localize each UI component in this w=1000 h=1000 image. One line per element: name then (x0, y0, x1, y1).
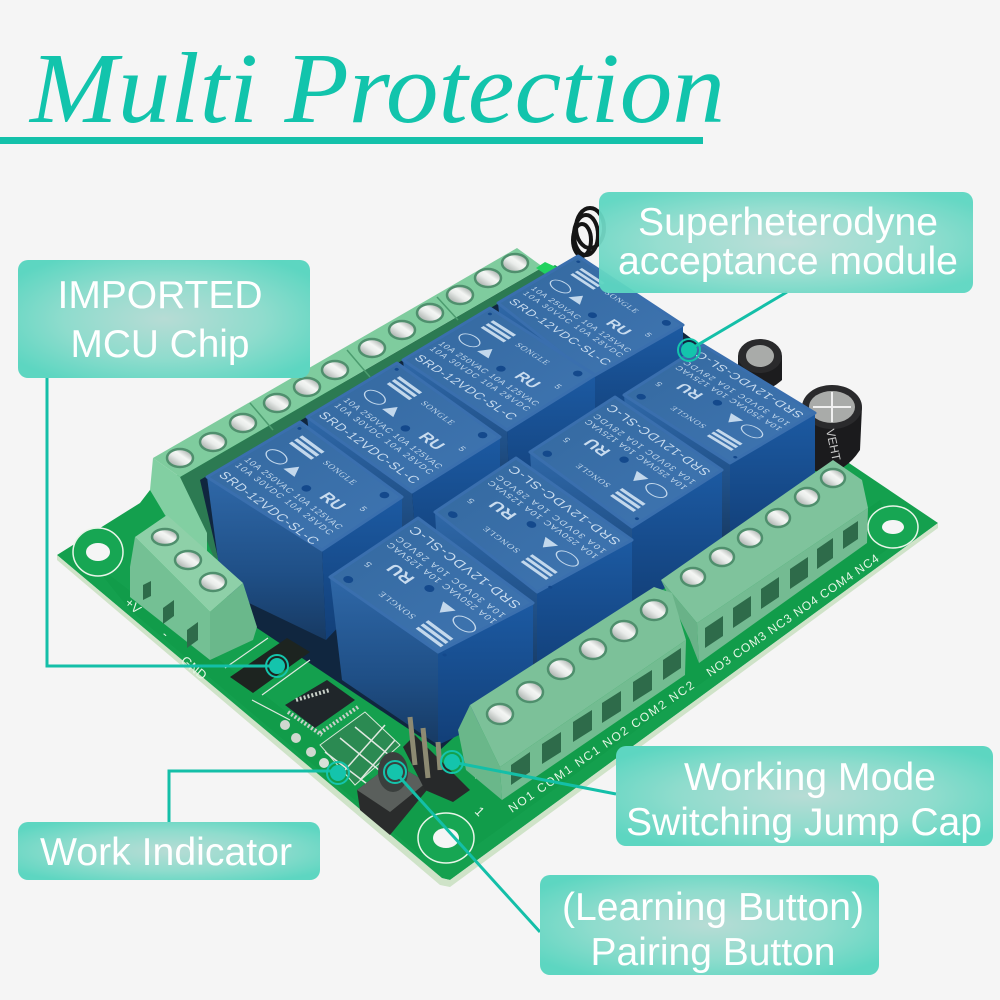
callout: superheterodyne module (599, 192, 973, 293)
power labels (122, 595, 210, 683)
relay front 3: 10A 250VAC 10A 125VAC (582, 418, 690, 491)
relay front 2: 5 (465, 497, 477, 505)
leader: pairing button (384, 761, 540, 932)
relay rear 1: SONGLE (320, 459, 360, 487)
power labels: GND (178, 653, 210, 683)
relay front 1: 10A 250VAC 10A 125VAC (384, 541, 499, 625)
leader: jump cap (441, 751, 616, 794)
callout: pairing button: Pairing Button (590, 931, 836, 974)
relay front 2: RU (485, 498, 521, 522)
jumper header: 1 (472, 804, 488, 819)
green PCB (57, 265, 938, 887)
relay rear 2: 10A 250VAC 10A 125VAC (341, 396, 445, 470)
relay front 1: 10A 30VDC 10A 28VDC (393, 535, 508, 619)
relay front 3 (530, 397, 722, 610)
relay front 4: SRD-12VDC-SL-C (692, 350, 807, 420)
relay rear 4: 5 (642, 331, 654, 339)
relay rear 3: 5 (552, 383, 565, 391)
leader: MCU chip (47, 378, 288, 677)
relay rear 4: 10A 250VAC 10A 125VAC (529, 285, 633, 354)
antenna coil (573, 208, 604, 256)
callout: MCU chip (18, 260, 310, 378)
relay rear 2: RU (414, 430, 449, 453)
relay rear 2 (307, 363, 500, 570)
power terminal block (130, 515, 257, 660)
relay front 3: RU (580, 436, 615, 458)
relay circuit board (57, 208, 938, 887)
relay rear 4: RU (602, 317, 635, 338)
callout: superheterodyne module: Superheterodyne (638, 201, 938, 244)
relay front 1: RU (382, 561, 419, 587)
callout: MCU chip: MCU Chip (70, 323, 250, 366)
callout: working mode (616, 746, 993, 846)
relay front 1: 5 (362, 560, 374, 569)
relay rear 2: 5 (456, 445, 469, 453)
relay front 4: 10A 250VAC 10A 125VAC (673, 364, 784, 432)
output terminal block 3-4 (661, 460, 868, 663)
relay front 1: SRD-12VDC-SL-C (406, 524, 524, 611)
relay rear 3: 10A 30VDC 10A 28VDC (427, 345, 533, 412)
output terminal block 1-2 (458, 587, 686, 800)
relay rear 3: RU (510, 370, 544, 391)
callout: work indicator (18, 822, 320, 880)
pairing button (357, 752, 427, 835)
relay rear 4: SRD-12VDC-SL-C (506, 297, 615, 367)
relay front 1: SONGLE (376, 589, 419, 620)
relay front 3: 5 (560, 436, 573, 444)
relay front 1 (330, 518, 533, 745)
relay front 4 (624, 345, 815, 545)
relay front 2 (435, 458, 632, 680)
title: Multi Protection (28, 32, 725, 144)
power labels: - (159, 627, 172, 641)
relay rear 2: SRD-12VDC-SL-C (315, 409, 424, 486)
relay front 2: SRD-12VDC-SL-C (505, 464, 624, 547)
relay rear 2: 10A 30VDC 10A 28VDC (332, 402, 436, 476)
relay rear 3: 10A 250VAC 10A 125VAC (436, 340, 542, 407)
relay rear 1: 5 (357, 505, 370, 513)
SMD chips (225, 638, 400, 790)
callout: superheterodyne module: acceptance module (618, 240, 958, 283)
relay rear 4: 10A 30VDC 10A 28VDC (521, 290, 625, 358)
callout: pairing button (540, 875, 879, 975)
relay rear 3 (403, 308, 595, 505)
relay front 4: SONGLE (668, 404, 709, 429)
mounting holes (73, 506, 918, 863)
relay rear 4 (498, 256, 683, 445)
capacitors: VEHT (823, 428, 844, 463)
relay front 4: RU (673, 380, 707, 401)
capacitors (738, 339, 862, 472)
relay front 4: 10A 30VDC 10A 28VDC (681, 359, 792, 427)
callout: working mode: Working Mode (684, 756, 936, 799)
rear terminal blocks (150, 248, 560, 565)
shadow under relays (200, 255, 800, 750)
relay rear 3: SRD-12VDC-SL-C (411, 353, 520, 422)
jumper header: 4 (470, 767, 485, 782)
callout: working mode: Switching Jump Cap (626, 801, 982, 844)
relay rear 1: SRD-12VDC-SL-C (215, 469, 323, 547)
relay rear 4: SONGLE (602, 290, 641, 315)
relay rear 1: 10A 250VAC 10A 125VAC (242, 456, 346, 531)
relay rear 1 (207, 422, 402, 640)
callout: pairing button: (Learning Button) (562, 886, 864, 929)
output labels 3-4: NO3 COM3 NC3 NO4 COM4 NC4 (704, 551, 882, 679)
relay front 3: SRD-12VDC-SL-C (603, 402, 714, 477)
callout: work indicator: Work Indicator (40, 831, 292, 874)
relay front 3: SONGLE (572, 462, 613, 489)
relay rear 3: SONGLE (513, 341, 553, 366)
relay rear 2: SONGLE (418, 399, 458, 427)
leader: work indicator (169, 762, 349, 822)
relay front 4: 5 (652, 380, 665, 388)
title underline (0, 137, 703, 144)
relay front 2: 10A 250VAC 10A 125VAC (485, 479, 601, 560)
power labels: +V (122, 595, 144, 617)
jumper header (403, 717, 488, 819)
relay rear 1: RU (315, 490, 349, 513)
relay rear 1: 10A 30VDC 10A 28VDC (233, 462, 337, 537)
output labels 1-2: NO1 COM1 NC1 NO2 COM2 NC2 (506, 678, 697, 815)
relay front 2: 10A 30VDC 10A 28VDC (493, 473, 609, 555)
callout: MCU chip: IMPORTED (58, 274, 262, 317)
relay front 2: SONGLE (480, 525, 522, 554)
leader: superheterodyne module (678, 292, 787, 361)
relay front 3: 10A 30VDC 10A 28VDC (591, 413, 698, 486)
